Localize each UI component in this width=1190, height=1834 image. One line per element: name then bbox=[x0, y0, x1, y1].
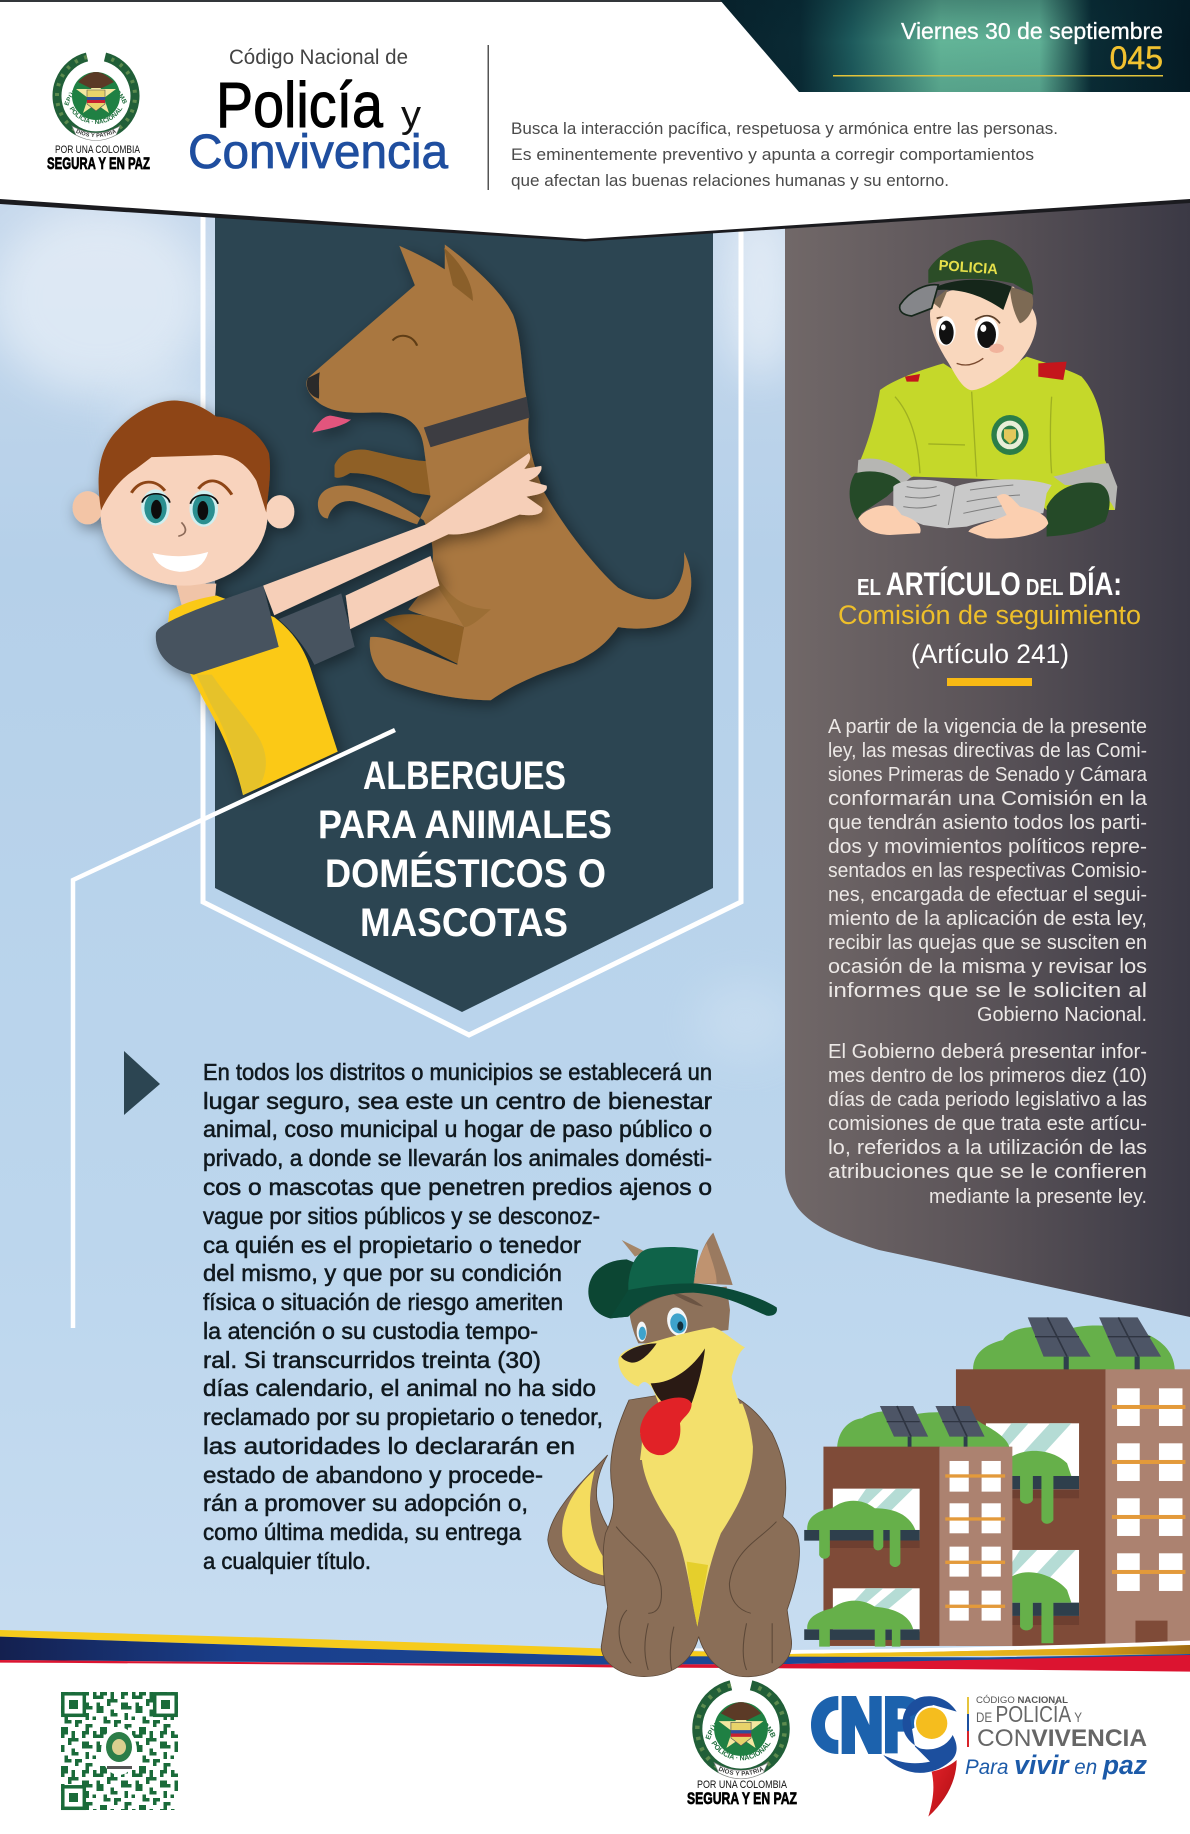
text block: article 241: mediante la presente ley. bbox=[929, 1186, 1147, 1208]
text block: main article: cos o mascotas que penetren predios ajenos o bbox=[203, 1174, 712, 1200]
illustration: police officer reading: POLICIA bbox=[938, 258, 999, 278]
text block: main article: la atención o su custodia tempo- bbox=[203, 1318, 538, 1344]
logo: police crest footer: POLICÍA · NACIONAL bbox=[711, 1740, 771, 1760]
mascot: dog head with cap bbox=[588, 1233, 777, 1460]
text block: article 241: nes, encargada de efectuar el segui- bbox=[828, 884, 1147, 906]
icon: triangle bullet bbox=[124, 1051, 160, 1115]
text block: article 241: miento de la aplicación de esta ley, bbox=[828, 908, 1147, 930]
title: albergues: MASCOTAS bbox=[360, 901, 568, 945]
flag stripes bbox=[0, 1630, 1190, 1672]
text block: article 241: mes dentro de los primeros diez (10) bbox=[828, 1065, 1147, 1087]
logo: police crest header bbox=[47, 52, 150, 173]
white diagonal line bbox=[73, 730, 395, 1328]
title: albergues: PARA ANIMALES bbox=[318, 803, 612, 847]
title: albergues: DOMÉSTICOS O bbox=[325, 851, 606, 896]
text block: article 241: sentados en las respectivas Comisio- bbox=[828, 860, 1147, 882]
title: albergues: ALBERGUES bbox=[363, 754, 566, 798]
text block: main article: estado de abandono y procede- bbox=[203, 1462, 543, 1488]
logo: police crest header: POLICÍA · NACIONAL bbox=[70, 106, 122, 124]
text block: header description: que afectan las buenas relaciones humanas y su entorno. bbox=[511, 171, 949, 190]
illustration: green buildings with solar panels bbox=[804, 1317, 1190, 1647]
text block: article 241: que tendrán asiento todos los parti- bbox=[828, 812, 1147, 834]
panel: dark chevron banner bbox=[215, 195, 713, 1012]
text block: main article: días calendario, el animal no ha sido bbox=[203, 1375, 596, 1401]
logo: police crest header: POR UNA COLOMBIA bbox=[55, 144, 141, 156]
text block: main article: privado, a donde se llevarán los animales domésti- bbox=[203, 1145, 712, 1171]
panel: article of the day background bbox=[785, 195, 1190, 1317]
text block: main article: a cualquier título. bbox=[203, 1548, 371, 1574]
text block: header description bbox=[511, 119, 1058, 190]
logo: police crest header: DIOS Y PATRIA bbox=[76, 129, 116, 138]
text block: article 241: El Gobierno deberá presentar infor- bbox=[828, 1041, 1147, 1063]
text block: article 241: ocasión de la misma y revisar los bbox=[828, 956, 1147, 978]
logo: CNPC Para vivir en paz: CÓDIGO NACIONAL bbox=[976, 1695, 1068, 1706]
title: Código Nacional de Policía y Convivencia: Convivencia bbox=[188, 126, 448, 179]
mascot: dog body bbox=[548, 1387, 799, 1677]
logo: police crest footer: POR UNA COLOMBIA bbox=[697, 1779, 788, 1791]
text block: article 241: ley, las mesas directivas de las Comi- bbox=[828, 740, 1147, 762]
text block: article 241: comisiones de que trata este artícu- bbox=[828, 1113, 1147, 1135]
heading: article of the day: EL ARTÍCULO DEL DÍA: bbox=[857, 566, 1122, 602]
text block: main article: ca quién es el propietario o tenedor bbox=[203, 1232, 581, 1258]
date panel bbox=[720, 0, 1190, 92]
illustration: police officer reading bbox=[850, 240, 1117, 539]
text block: article 241: Gobierno Nacional. bbox=[977, 1004, 1147, 1026]
logo: CNPC Para vivir en paz: CONVIVENCIA bbox=[977, 1725, 1147, 1752]
panel: header bbox=[0, 0, 1190, 242]
text block: header description: Es eminentemente preventivo y apunta a corregir comportamientos bbox=[511, 145, 1034, 164]
logo: police crest header: REPÚBLICA DE COLOMBIA bbox=[64, 90, 127, 106]
heading: article of the day bbox=[838, 566, 1141, 686]
text block: article 241: conformarán una Comisión en la bbox=[828, 788, 1148, 810]
footer white background bbox=[0, 1655, 1190, 1834]
text block: main article: vague por sitios públicos y se desconoz- bbox=[203, 1203, 600, 1229]
text block: article 241: recibir las quejas que se susciten en bbox=[828, 932, 1147, 954]
text block: main article: las autoridades lo declararán en bbox=[203, 1433, 575, 1459]
text block: main article bbox=[203, 1059, 712, 1574]
QR code bbox=[61, 1692, 178, 1810]
text block: main article: del mismo, y que por su condición bbox=[203, 1260, 562, 1286]
logo: police crest footer: SEGURA Y EN PAZ bbox=[687, 1789, 797, 1808]
text block: article 241: lo, referidos a la utilización de las bbox=[828, 1137, 1147, 1159]
heading: article of the day: (Artículo 241) bbox=[911, 639, 1069, 669]
text block: article 241: dos y movimientos políticos repre- bbox=[828, 836, 1147, 858]
logo: CNPC Para vivir en paz: DE POLICÍA Y bbox=[976, 1701, 1083, 1727]
title: Código Nacional de Policía y Convivencia bbox=[188, 46, 448, 179]
text block: article 241: días de cada periodo legislativo a las bbox=[828, 1089, 1147, 1111]
logo: police crest footer bbox=[687, 1680, 797, 1808]
text block: main article: animal, coso municipal u hogar de paso público o bbox=[203, 1116, 712, 1142]
divider bbox=[488, 45, 489, 190]
logo: police crest footer: REPÚBLICA DE COLOMBIA bbox=[705, 1722, 776, 1740]
title: albergues bbox=[318, 754, 612, 945]
text block: main article: rán a promover su adopción o, bbox=[203, 1490, 528, 1516]
title: Código Nacional de Policía y Convivencia: Código Nacional de bbox=[229, 46, 408, 69]
title: Código Nacional de Policía y Convivencia: Policía bbox=[216, 69, 383, 141]
heading: article of the day: Comisión de seguimiento bbox=[838, 600, 1141, 630]
text block: main article: lugar seguro, sea este un centro de bienestar bbox=[203, 1088, 712, 1114]
text block: main article: reclamado por su propietario o tenedor, bbox=[203, 1404, 603, 1430]
title: Código Nacional de Policía y Convivencia: y bbox=[401, 94, 421, 136]
text block: article 241: A partir de la vigencia de la presente bbox=[828, 716, 1147, 738]
text block: header description: Busca la interacción pacífica, respetuosa y armónica entre las personas. bbox=[511, 119, 1058, 138]
logo: CNPC Para vivir en paz bbox=[811, 1695, 1147, 1817]
white chevron outline bbox=[203, 195, 741, 1035]
logo: police crest header: SEGURA Y EN PAZ bbox=[47, 154, 150, 173]
text block: article 241: informes que se le soliciten al bbox=[828, 980, 1147, 1002]
logo: police crest footer: DIOS Y PATRIA bbox=[718, 1766, 764, 1776]
text block: article 241: siones Primeras de Senado y Cámara bbox=[828, 764, 1148, 786]
date panel: 045 bbox=[1110, 40, 1163, 76]
illustration: boy reaching out to dog bbox=[72, 401, 547, 795]
logo: CNPC Para vivir en paz: Para vivir en paz bbox=[965, 1750, 1147, 1780]
text block: article 241 bbox=[828, 716, 1148, 1208]
text block: main article: como última medida, su entrega bbox=[203, 1519, 521, 1545]
date panel: Viernes 30 de septiembre bbox=[901, 18, 1163, 44]
text block: main article: ral. Si transcurridos treinta (30) bbox=[203, 1347, 541, 1373]
illustration: brown dog held by boy bbox=[306, 245, 691, 700]
text block: main article: En todos los distritos o municipios se establecerá un bbox=[203, 1059, 712, 1085]
text block: article 241: atribuciones que se le confieren bbox=[828, 1161, 1147, 1183]
text block: main article: física o situación de riesgo ameriten bbox=[203, 1289, 563, 1315]
